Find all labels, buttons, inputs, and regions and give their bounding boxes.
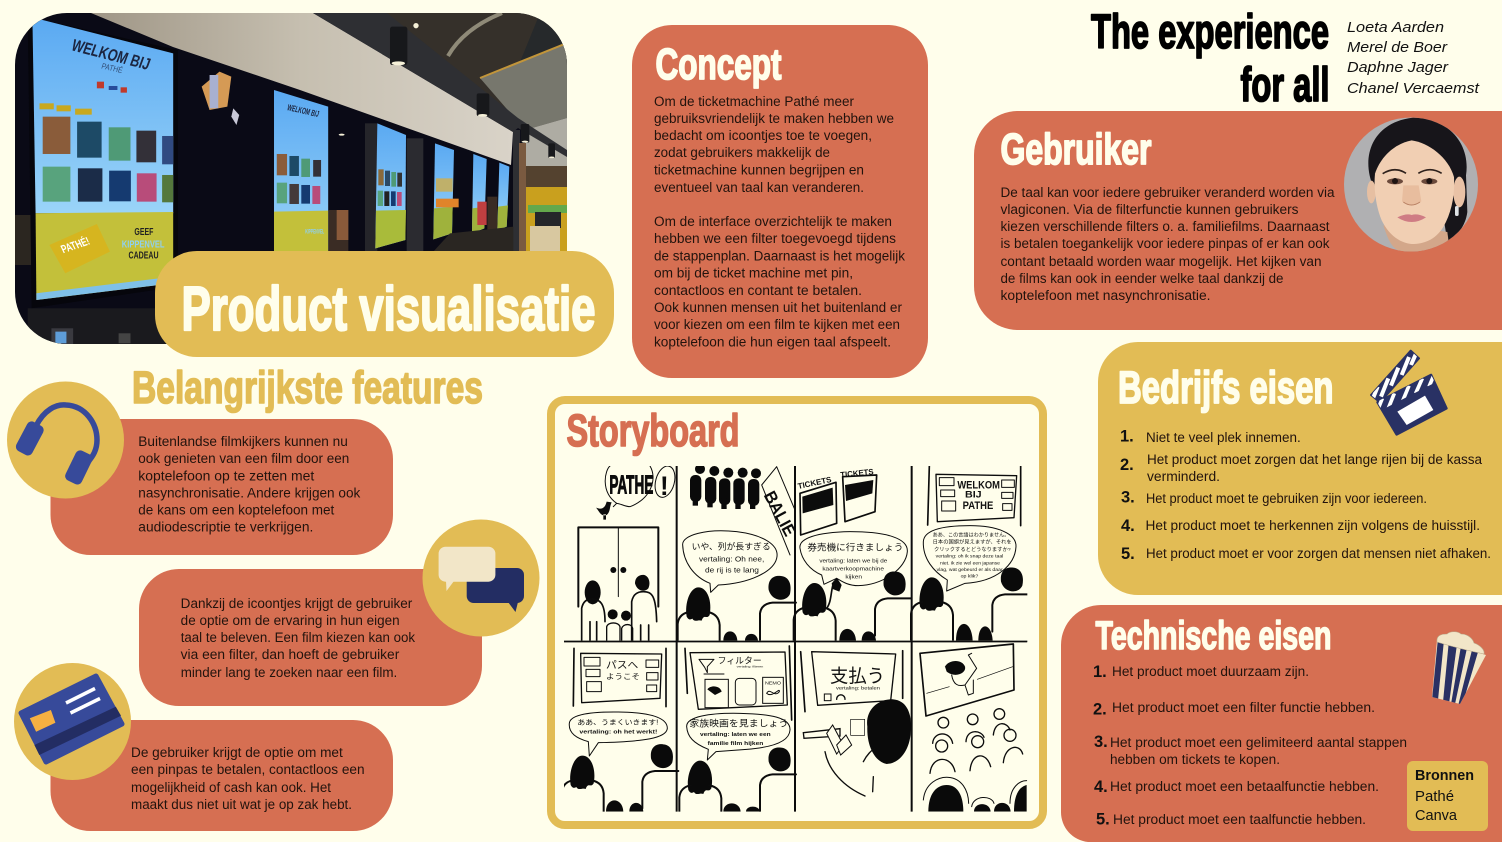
comic panel 4: welcome screen: PATHE (963, 500, 994, 512)
authors: Loeta Aarden (1347, 19, 1444, 36)
comic panel 4: welcome screen: vlag, wat gebeurd er als daar (937, 567, 1003, 572)
list: bedrijfs eisen: 1. (1120, 428, 1134, 446)
sources box: Pathé (1415, 789, 1454, 805)
heading: technische eisen: Technische eisen (1096, 614, 1332, 658)
icon: speech bubbles (422, 520, 540, 636)
text: concept description: Ook kunnen mensen uit het buitenland er (654, 300, 903, 315)
title: for all (1240, 59, 1330, 112)
photo: ticket machines at Pathé: KIPPENVEL (305, 227, 324, 235)
authors: Merel de Boer (1347, 39, 1448, 56)
text: gebruiker description: kiezen verschillende filters o. a. familiefilms. Daarnaast (1000, 219, 1330, 234)
text: headphones feature: koptelefoon op te zetten met (138, 468, 315, 484)
panel: storyboard (551, 400, 1043, 825)
text: concept description: de stappenplan. Daarnaast is het mogelijk (654, 248, 905, 264)
text: concept description: contactloos en contant te betalen. (654, 283, 862, 298)
text: language feature: via een filter, dan hoeft de gebruiker (181, 647, 400, 662)
comic panel 6: filter screen: vertaling: laten we een (700, 732, 771, 738)
comic panel 6: filter screen: NEMO (765, 681, 781, 687)
comic panel 2: queue: vertaling: Oh nee, (699, 557, 764, 564)
text: concept description: gebruiksvriendelijk te maken hebben we (654, 111, 894, 126)
list: technische eisen: Het product moet een taalfunctie hebben. (1113, 812, 1366, 827)
comic panel 4: welcome screen: niet. ik zie wel een japanse (940, 560, 1001, 565)
heading: concept: Concept (656, 40, 782, 89)
comic panel 3: ticket machines (794, 467, 911, 646)
text: headphones feature: audiodescriptie te verkrijgen. (138, 520, 313, 534)
comic: top row (578, 464, 1028, 650)
text: payment feature: mogelijkheid of cash kan ook. Het (131, 780, 331, 795)
sources box: Canva (1415, 808, 1458, 824)
text: concept description: zodat gebruikers makkelijk de (654, 145, 830, 160)
list: bedrijfs eisen: Het product moet zorgen dat het lange rijen bij de kassa (1147, 452, 1483, 467)
comic panel 4: welcome screen: WELKOM (957, 479, 1000, 491)
panel: gebruiker (974, 111, 1502, 330)
comic panel 6: filter screen: familie film hijken (708, 741, 763, 747)
text: concept description: bedacht om icoontjes toe te voegen, (654, 128, 872, 143)
list: bedrijfs eisen: Niet te veel plek innemen. (1146, 430, 1301, 445)
text: language feature: taal te beleven. Een film kiezen kan ook (181, 630, 415, 645)
panel: feature payment (14, 663, 393, 831)
panel: feature language icons (139, 520, 540, 706)
list: bedrijfs eisen: 5. (1121, 545, 1135, 563)
comic panel 6: filter screen: 家族映画を見ましょう (689, 718, 788, 729)
list: technische eisen: Het product moet een filter functie hebben. (1112, 700, 1375, 715)
list: bedrijfs eisen: 2. (1120, 456, 1134, 474)
sources box (1407, 761, 1488, 831)
comic panel 2: queue: いや、列が長すぎる (692, 540, 771, 551)
photo: ticket machines at Pathé: CADEAU (129, 250, 159, 261)
text: payment feature (131, 745, 365, 812)
text: concept description: voor kiezen om een film te kijken met een (654, 317, 900, 332)
text: headphones feature: ook genieten van een film door een (138, 451, 349, 466)
comic panel 5: japanese interface: ああ、うまくいきます! (577, 718, 658, 726)
text: payment feature: De gebruiker krijgt de optie om met (131, 745, 343, 760)
text: concept description (654, 94, 905, 350)
title (1091, 6, 1330, 112)
icon: bank card (14, 663, 131, 780)
comic panel 1: entrance: PATHE (609, 469, 653, 499)
heading: product visualisatie: Product visualisatie (182, 275, 596, 344)
text: payment feature: maakt dus niet uit wat je op zak hebt. (131, 797, 352, 812)
text: concept description: Om de interface overzichtelijk te maken (654, 214, 892, 229)
list: technische eisen: 4. (1094, 778, 1108, 796)
text: concept description: om bij de ticket machine met pin, (654, 266, 853, 280)
list: technische eisen: 3. (1094, 733, 1108, 751)
comic panel 1: entrance (578, 464, 678, 641)
icon: headphones (7, 382, 124, 498)
comic panel 7: payment screen (801, 651, 911, 796)
text: concept description: Om de ticketmachine Pathé meer (654, 94, 855, 109)
text: language feature: minder lang te zoeken naar een film. (181, 665, 397, 680)
comic panel 4: welcome screen: vertaling: oh ik snap deze taal (936, 554, 1003, 559)
text: gebruiker description (1000, 185, 1335, 303)
icon: popcorn (1432, 632, 1486, 706)
list: bedrijfs eisen (1120, 428, 1491, 563)
text: headphones feature: nasynchronisatie. Andere krijgen ook (138, 486, 361, 500)
comic panel 3: ticket machines: kaartverkoopmachine (822, 566, 884, 572)
comic panel 7: payment screen: vertaling: betalen (836, 685, 881, 690)
comic panel 6: filter screen: フィルター (718, 655, 762, 665)
list: technische eisen: 1. (1093, 663, 1107, 681)
panel: technische eisen (1061, 605, 1502, 842)
comic panel 4: welcome screen: ああ、この言語はわかりません。 (933, 531, 1009, 538)
title: The experience (1091, 6, 1329, 59)
list: bedrijfs eisen: Het product moet er voor zorgen dat mensen niet afhaken. (1146, 546, 1491, 561)
list: technische eisen: 5. (1096, 810, 1110, 828)
list: bedrijfs eisen: 4. (1121, 517, 1135, 535)
text: concept description: eventueel van taal kan veranderen. (654, 180, 864, 195)
heading: bedrijfs eisen: Bedrijfs eisen (1118, 362, 1334, 413)
sources box: Bronnen (1415, 768, 1474, 784)
photo: ticket machines at Pathé: GEEF (134, 227, 154, 238)
photo: ticket machines at Pathé: WELKOM BIJ (69, 35, 153, 73)
text: language feature (181, 596, 415, 680)
authors (1347, 19, 1480, 97)
panel: feature headphones (7, 382, 393, 555)
list: bedrijfs eisen: Het product moet te gebruiken zijn voor iedereen. (1146, 491, 1427, 506)
photo: ticket machines at Pathé (15, 13, 567, 345)
list: technische eisen: Het product moet een betaalfunctie hebben. (1110, 779, 1379, 794)
comic panel 2: queue: BALIE (760, 487, 800, 540)
list: bedrijfs eisen: 3. (1121, 488, 1135, 506)
comic panel 3: ticket machines: 券売機に行きましょう (807, 542, 903, 553)
text: gebruiker description: koptelefoon met nasynchronisatie. (1000, 288, 1210, 303)
text: language feature: de optie om de ervaring in hun eigen (181, 613, 400, 628)
comic panel 4: welcome screen: 日本の国旗が見えますが、それを (933, 538, 1012, 545)
comic panel 4: welcome screen (911, 466, 1028, 641)
comic panel 3: ticket machines: TICKETS (840, 467, 875, 480)
panel: product visualisatie label (155, 251, 614, 357)
comic panel 5: japanese interface: ようこそ (606, 672, 640, 681)
photo: ticket machines at Pathé: PATHÉ (100, 61, 124, 75)
text: concept description: ticketmachine kunnen begrijpen en (654, 162, 864, 178)
text: payment feature: een pinpas te betalen, contactloos een (131, 762, 365, 777)
list: technische eisen (1093, 663, 1407, 828)
photo: ticket machines at Pathé: WELKOM BIJ (286, 103, 320, 120)
comic panel 3: ticket machines: kijken (845, 574, 862, 580)
text: gebruiker description: vlagiconen. Via de filterfunctie kunnen gebruikers (1000, 202, 1299, 217)
list: technische eisen: Het product moet duurzaam zijn. (1112, 664, 1309, 679)
text: language feature: Dankzij de icoontjes krijgt de gebruiker (181, 596, 413, 611)
comic panel 4: welcome screen: BIJ (965, 490, 982, 500)
text: headphones feature: de kans om een koptelefoon met (138, 502, 335, 518)
panel: bedrijfs eisen (1098, 342, 1502, 595)
comic panel 8: cinema audience (920, 644, 1027, 812)
text: gebruiker description: De taal kan voor iedere gebruiker veranderd worden via (1000, 185, 1335, 200)
comic panel 6: filter screen: vertaling: filteren (737, 664, 764, 668)
authors: Chanel Vercaemst (1347, 80, 1480, 97)
text: headphones feature: Buitenlandse filmkijkers kunnen nu (138, 434, 348, 449)
heading: gebruiker: Gebruiker (1000, 125, 1152, 174)
heading: storyboard: Storyboard (566, 405, 740, 456)
comic panel 4: welcome screen: クリックするとどうなりますか? (934, 546, 1011, 553)
photo: ticket machines at Pathé: PATHÉ! (58, 234, 92, 256)
list: technische eisen: hebben om tickets te kopen. (1110, 752, 1280, 767)
comic: bottom row (562, 641, 1027, 823)
comic panel 3: ticket machines: TICKETS (797, 475, 833, 491)
icon: clapperboard (1371, 348, 1446, 434)
list: bedrijfs eisen: Het product moet te herkennen zijn volgens de huisstijl. (1146, 518, 1480, 533)
text: gebruiker description: de films kan ook in eender welke taal dankzij de (1000, 271, 1284, 286)
comic panel 5: japanese interface (562, 648, 678, 818)
comic panel 1: entrance: ! (660, 471, 669, 501)
comic panel 6: filter screen (679, 646, 796, 823)
text: headphones feature (138, 434, 361, 534)
list: bedrijfs eisen: verminderd. (1147, 469, 1220, 484)
text: concept description: hebben we een filter toegevoegd tijdens (654, 231, 896, 246)
list: technische eisen: Het product moet een gelimiteerd aantal stappen (1110, 735, 1407, 750)
comic panel 2: queue (678, 464, 800, 650)
comic panel 5: japanese interface: vertaling: oh het werkt! (579, 729, 658, 735)
authors: Daphne Jager (1347, 59, 1449, 76)
portrait: user persona (1344, 117, 1478, 254)
text: concept description: koptelefoon die hun eigen taal afspeelt. (654, 334, 891, 350)
text: gebruiker description: contant betaald worden waar mogelijk. Het kijken van (1000, 254, 1322, 269)
text: gebruiker description: is betalen toegankelijk voor iedere pinpas of er kan ook (1000, 236, 1330, 251)
comic panel 2: queue: de rij is te lang (705, 567, 759, 574)
comic panel 7: payment screen: 支払う (830, 665, 885, 686)
comic panel 4: welcome screen: op klik? (961, 573, 979, 578)
comic panel 3: ticket machines: vertaling: laten we bij de (819, 558, 887, 564)
heading: belangrijkste features: Belangrijkste features (132, 362, 483, 413)
panel: concept (632, 25, 928, 378)
photo: ticket machines at Pathé: KIPPENVEL (122, 239, 165, 250)
list: technische eisen: 2. (1093, 700, 1107, 718)
comic panel 5: japanese interface: パスへ (606, 659, 638, 671)
